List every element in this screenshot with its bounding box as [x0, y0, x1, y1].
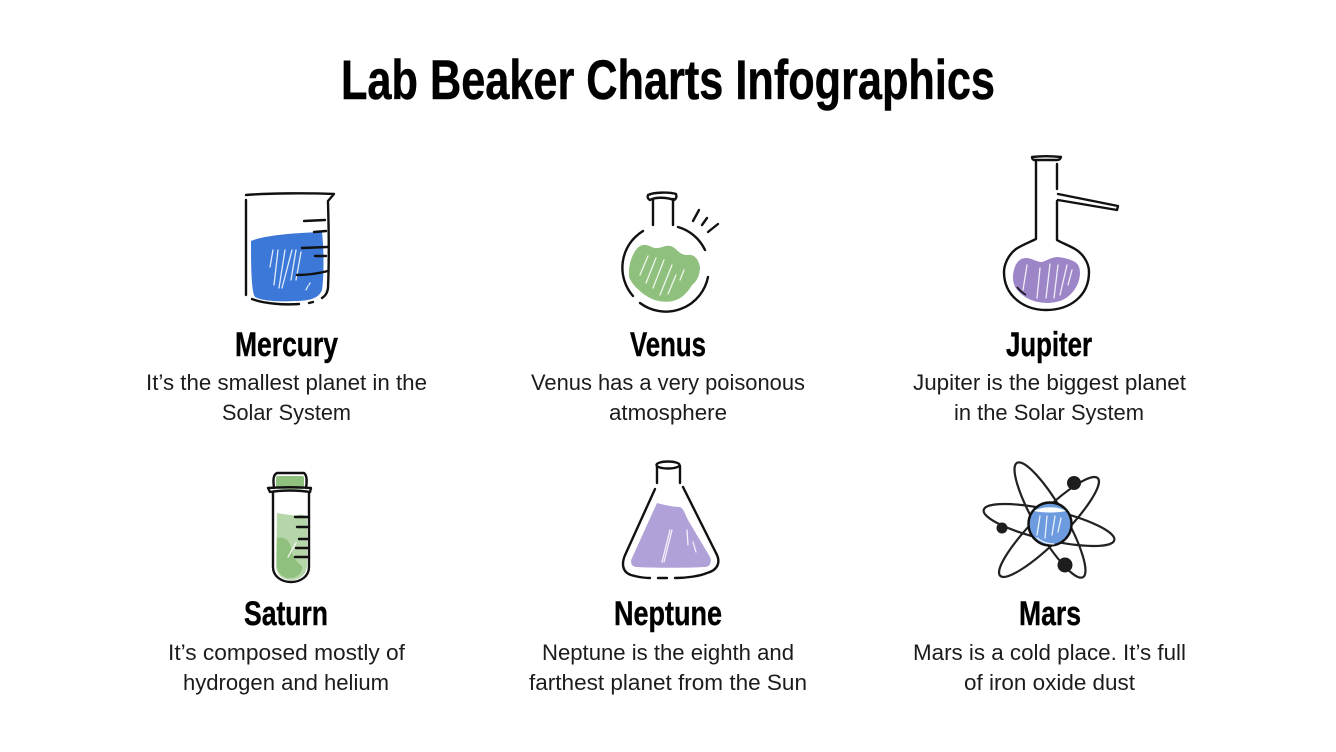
- text: Saturn description: [168, 640, 406, 695]
- heading: Mercury: Mercury: [235, 326, 338, 364]
- text: Mercury description: [146, 370, 427, 425]
- text: Mercury description: It’s the smallest planet in the: [146, 370, 427, 395]
- heading: Neptune: Neptune: [614, 595, 722, 633]
- text: Jupiter description: in the Solar System: [954, 400, 1144, 425]
- panel: Neptune: [529, 462, 807, 695]
- text: Saturn description: It’s composed mostly of: [168, 640, 406, 665]
- panel: Mercury: [146, 193, 427, 425]
- text: Venus description: atmosphere: [609, 400, 727, 425]
- heading: Jupiter: Jupiter: [1006, 326, 1092, 364]
- icon: purple distillation flask: [1004, 156, 1118, 310]
- panel: Saturn: [168, 473, 406, 695]
- heading: Venus: Venus: [630, 326, 706, 364]
- heading: Mars: Mars: [1019, 595, 1081, 633]
- icon: green test tube: [268, 473, 311, 582]
- text: Mars description: of iron oxide dust: [964, 670, 1135, 695]
- heading: Saturn: Saturn: [244, 595, 328, 633]
- icon: purple conical flask: [623, 462, 718, 578]
- icon: blue beaker: [246, 193, 334, 304]
- text: Venus description: [531, 370, 805, 425]
- text: Neptune description: farthest planet from the Sun: [529, 670, 807, 695]
- icon: atom: [980, 455, 1118, 586]
- text: Neptune description: [529, 640, 807, 695]
- text: Venus description: Venus has a very poisonous: [531, 370, 805, 395]
- text: Mars description: Mars is a cold place. It’s full: [913, 640, 1186, 665]
- text: Neptune description: Neptune is the eighth and: [542, 640, 794, 665]
- panel: Mars: [913, 455, 1186, 695]
- text: Jupiter description: Jupiter is the biggest planet: [913, 370, 1186, 395]
- panel: Venus: [531, 193, 805, 425]
- text: Jupiter description: [913, 370, 1186, 425]
- icon: green round flask: [622, 193, 718, 312]
- text: Saturn description: hydrogen and helium: [183, 670, 389, 695]
- text: Mercury description: Solar System: [222, 400, 351, 425]
- text: Mars description: [913, 640, 1186, 695]
- panel: Jupiter: [913, 156, 1186, 425]
- title: Lab Beaker Charts Infographics: [341, 48, 995, 111]
